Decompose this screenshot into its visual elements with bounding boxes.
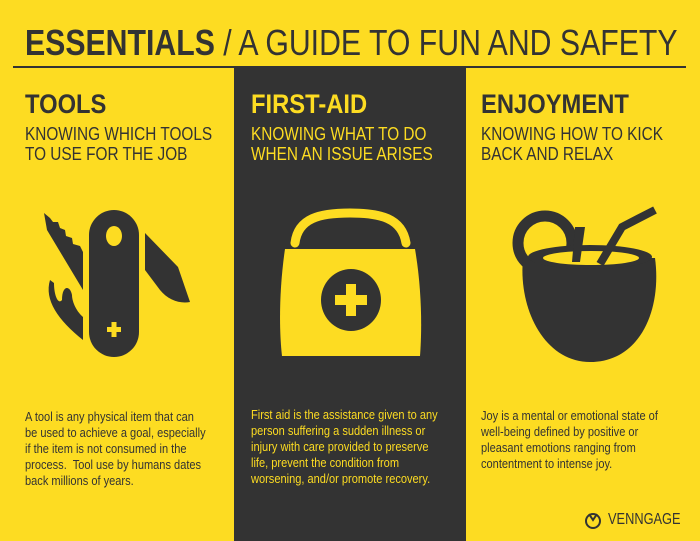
text: enjoyment description: well-being defined by positive or	[481, 424, 638, 439]
subheading: enjoyment	[481, 123, 663, 164]
heading: enjoyment: ENJOYMENT	[481, 89, 629, 119]
subheading: tools: TO USE FOR THE JOB	[25, 143, 187, 164]
text: tools description: if the item is not consumed in the	[25, 441, 187, 456]
text: first-aid description: worsening, and/or promote recovery.	[251, 471, 430, 486]
subheading: enjoyment: KNOWING HOW TO KICK	[481, 123, 663, 144]
text: tools description: back millions of years.	[25, 473, 134, 488]
text: tools description: A tool is any physical item that can	[25, 409, 194, 424]
text: enjoyment description: contentment to intense joy.	[481, 456, 612, 471]
text: first-aid description: life, prevent the condition from	[251, 455, 399, 470]
text: first-aid description: injury with care provided to preserve	[251, 439, 429, 454]
text: first-aid description: person suffering a sudden illness or	[251, 423, 425, 438]
icon: first-aid bag	[280, 213, 421, 356]
text: tools description: be used to achieve a goal, especially	[25, 425, 206, 440]
text: tools description	[25, 409, 206, 488]
text: first-aid description: First aid is the assistance given to any	[251, 407, 438, 422]
subheading: first-aid: KNOWING WHAT TO DO	[251, 123, 426, 144]
icon: coconut drink	[518, 210, 656, 362]
title: ESSENTIALS / A GUIDE TO FUN AND SAFETY	[25, 22, 678, 63]
text: enjoyment description	[481, 408, 658, 471]
heading: tools: TOOLS	[25, 89, 106, 119]
text: enjoyment description: Joy is a mental or emotional state of	[481, 408, 658, 423]
text: tools description: process. Tool use by humans dates	[25, 457, 201, 472]
subheading: enjoyment: BACK AND RELAX	[481, 143, 613, 164]
text: first-aid description	[251, 407, 438, 486]
logo: venngage: VENNGAGE	[608, 511, 681, 528]
text: enjoyment description: pleasant emotions ranging from	[481, 440, 636, 455]
panel: first-aid background	[234, 68, 466, 541]
subheading: first-aid: WHEN AN ISSUE ARISES	[251, 143, 433, 164]
subheading: tools: KNOWING WHICH TOOLS	[25, 123, 212, 144]
subheading: tools	[25, 123, 212, 164]
subheading: first-aid	[251, 123, 433, 164]
heading: first-aid: FIRST-AID	[251, 89, 367, 119]
